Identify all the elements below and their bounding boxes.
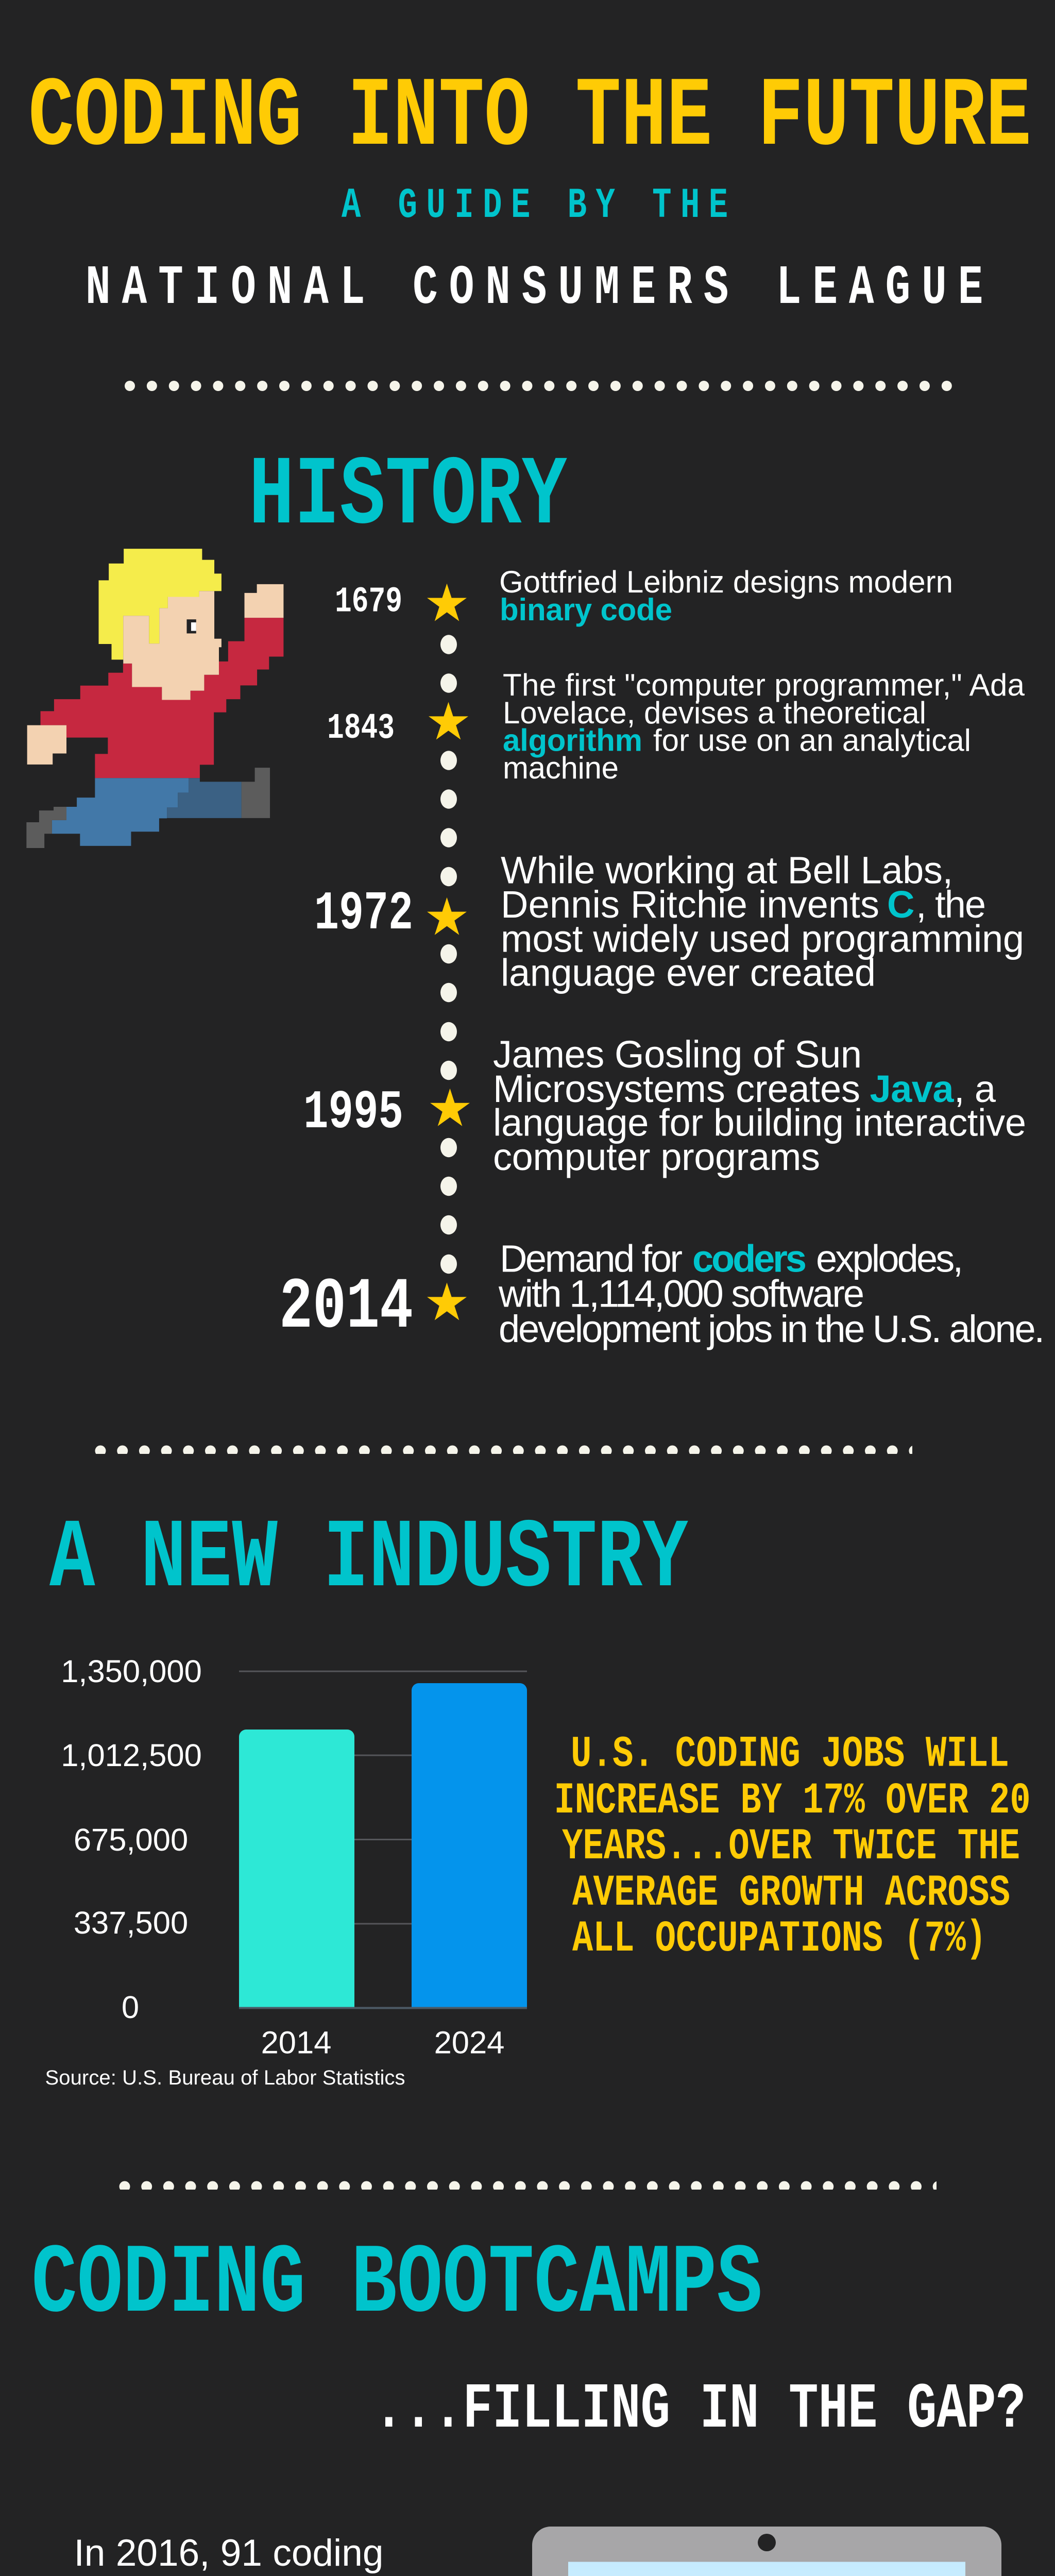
timeline entry 1972 (314, 849, 1024, 994)
timeline entry 2014: explodes, (816, 1238, 963, 1280)
icon: pixel running boy (26, 549, 283, 848)
bar chart: 1,012,500 (61, 1738, 202, 1773)
timeline entry 1843: algorithm (503, 723, 642, 758)
subtitle: national consumers league: NATIONAL CONSUMERS LEAGUE (86, 257, 994, 320)
text block: graduates: In 2016, 91 coding (74, 2532, 383, 2574)
timeline entry 1995: James Gosling of Sun (493, 1033, 862, 1076)
timeline entry 2014 (279, 1238, 1045, 1350)
timeline entry 1679: Gottfried Leibniz designs modern (499, 565, 953, 599)
timeline entry 1995: , a (954, 1067, 996, 1110)
timeline entry 1972: 1972 (314, 883, 413, 945)
timeline entry 2014: coders (692, 1238, 807, 1280)
heading: history: HISTORY (249, 442, 567, 552)
timeline entry 1972: Dennis Ritchie invents (501, 883, 879, 926)
dotted divider 3 (120, 2181, 937, 2190)
timeline dots (440, 635, 457, 1274)
icon: laptop (532, 2527, 1001, 2576)
timeline entry 1843: Lovelace, devises a theoretical (503, 696, 926, 730)
dotted divider 1 (130, 381, 948, 391)
bar chart: 0 (122, 1990, 139, 2025)
bar chart: 337,500 (74, 1905, 188, 1941)
timeline entry 1972: , the (916, 883, 986, 926)
timeline entry 2014: 2014 (279, 1267, 413, 1349)
bar chart: 2024 (434, 2025, 504, 2061)
timeline entry 1843: 1843 (327, 708, 395, 749)
bar chart: 2014 (261, 2025, 331, 2061)
subtitle: a guide by the: A GUIDE BY THE (342, 182, 737, 230)
timeline entry 1843: The first "computer programmer," Ada (503, 668, 1025, 702)
timeline entry 1843 (327, 668, 1025, 785)
timeline entry 1679: binary code (500, 592, 672, 627)
bar chart (61, 1654, 527, 2061)
timeline entry 1972: most widely used programming (501, 918, 1024, 960)
heading: coding bootcamps: CODING BOOTCAMPS (31, 2229, 762, 2341)
timeline entry 1995: 1995 (303, 1082, 403, 1144)
timeline entry 1995: Microsystems creates (493, 1067, 860, 1110)
timeline entry 1995: Java (870, 1067, 954, 1110)
timeline entry 1843: for use on an analytical (653, 723, 971, 758)
bar chart: 1,350,000 (61, 1654, 202, 1689)
timeline entry 1843: machine (503, 751, 619, 785)
timeline entry 1995: language for building interactive (493, 1101, 1026, 1144)
timeline entry 1679: 1679 (335, 582, 402, 623)
timeline entry 1995: computer programs (493, 1136, 820, 1178)
timeline entry 1972: language ever created (501, 952, 876, 994)
timeline entry 1972: While working at Bell Labs, (501, 849, 953, 891)
timeline entry 2014: development jobs in the U.S. alone. (499, 1308, 1045, 1350)
timeline entry 1972: C (887, 883, 914, 926)
timeline entry 1995 (303, 1033, 1026, 1178)
timeline entry 2014: with 1,114,000 software (498, 1273, 864, 1315)
dotted divider 2 (95, 1446, 912, 1454)
chart source: Source: U.S. Bureau of Labor Statistics (45, 2066, 405, 2089)
callout: job growth (554, 1730, 1031, 1964)
timeline entry 2014: Demand for (500, 1238, 683, 1280)
heading: a new industry: A NEW INDUSTRY (49, 1504, 688, 1615)
timeline entry 1679 (335, 565, 953, 627)
bar chart: 675,000 (74, 1822, 188, 1858)
